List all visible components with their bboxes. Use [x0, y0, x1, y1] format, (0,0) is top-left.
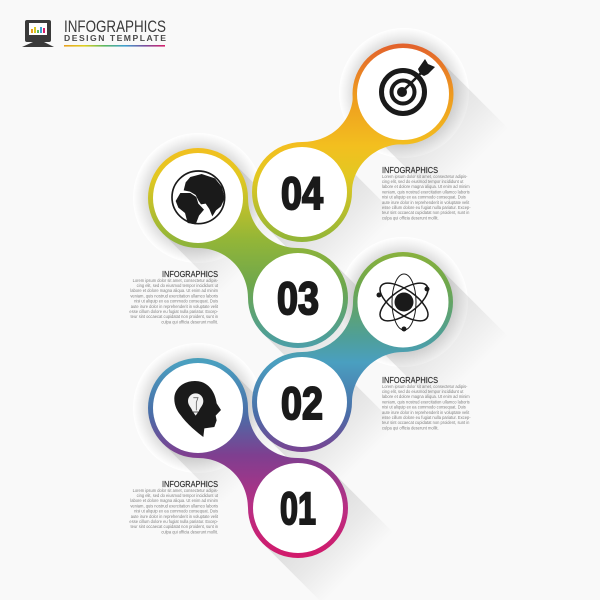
ring: globe: [148, 148, 248, 248]
text block: top right: cing elit, sed do eiusmod tempor incididunt ut: [382, 179, 464, 184]
icon: head with light bulb: [174, 381, 221, 437]
icon: computer monitor: [22, 20, 54, 47]
text block: middle left: teur sint occaecat cupidatat non proident, sunt in: [131, 314, 218, 319]
number 01: 01: [280, 483, 316, 534]
text block: top right: [382, 165, 471, 220]
text block: top right: Lorem ipsum dolor sit amet, consectetur adipis-: [382, 173, 468, 179]
connector: globe to 03: [198, 198, 298, 298]
text block: middle left: nisi ut aliquip ex ea commodo consequat. Duis: [134, 298, 219, 304]
text block: middle left: INFOGRAPHICS: [162, 269, 218, 279]
text block: top right: aute irure dolor in reprehenderit in voluptate velit: [382, 199, 470, 205]
text block: bottom left: nisi ut aliquip ex ea commodo consequat. Duis: [134, 508, 219, 514]
text block: lower right: teur sint occaecat cupidatat non proident, sunt in: [382, 420, 470, 425]
text block: middle left: labore et dolore magna aliqua. Ut enim ad minim: [130, 288, 218, 293]
text block: lower right: Lorem ipsum dolor sit amet, consectetur adipis-: [382, 383, 468, 389]
logo: [22, 17, 166, 47]
text block: top right: esse cillum dolore eu fugiat nulla pariatur. Excep-: [382, 205, 471, 210]
ring: 04: [252, 142, 352, 242]
text block: top right: culpa qui officia deserunt mollit.: [382, 215, 439, 220]
text block: lower right: veniam, quis nostrud exercitation ullamco laboris: [382, 399, 470, 404]
ring: head: [148, 358, 248, 458]
text block: lower right: nisi ut aliquip ex ea commodo consequat. Duis: [382, 404, 466, 410]
text block: middle left: aute irure dolor in reprehenderit in voluptate velit: [131, 303, 219, 309]
text block: bottom left: Lorem ipsum dolor sit amet, consectetur adipis-: [133, 487, 218, 493]
connector: head to 01: [198, 408, 298, 508]
text block: middle left: esse cillum dolore eu fugiat nulla pariatur. Excep-: [129, 309, 218, 314]
number 04: 04: [281, 168, 323, 219]
icon: target: [382, 59, 435, 114]
text block: lower right: [382, 375, 471, 430]
icon: atom: [374, 274, 434, 332]
text block: top right: labore et dolore magna aliqua. Ut enim ad minim: [382, 184, 470, 189]
text block: bottom left: esse cillum dolore eu fugiat nulla pariatur. Excep-: [129, 519, 218, 524]
number 02: 02: [281, 378, 323, 429]
text block: bottom left: cing elit, sed do eiusmod tempor incididunt ut: [137, 493, 219, 498]
ring: 01: [248, 458, 348, 558]
ring: 03: [248, 248, 348, 348]
icon: globe: [172, 171, 225, 224]
text block: lower right: aute irure dolor in reprehenderit in voluptate velit: [382, 409, 470, 415]
ring: 02: [252, 352, 352, 452]
text block: middle left: Lorem ipsum dolor sit amet, consectetur adipis-: [133, 277, 218, 283]
number 03: 03: [277, 273, 319, 324]
text block: lower right: culpa qui officia deserunt mollit.: [382, 425, 439, 430]
text block: lower right: INFOGRAPHICS: [382, 375, 438, 385]
ring: atom: [353, 252, 453, 352]
rainbow line: [64, 45, 165, 47]
text block: bottom left: aute irure dolor in reprehenderit in voluptate velit: [131, 513, 219, 519]
text block: top right: INFOGRAPHICS: [382, 165, 438, 175]
text block: top right: nisi ut aliquip ex ea commodo consequat. Duis: [382, 194, 466, 200]
text block: bottom left: culpa qui officia deserunt mollit.: [161, 529, 218, 534]
text block: bottom left: [129, 479, 219, 534]
text block: bottom left: labore et dolore magna aliqua. Ut enim ad minim: [130, 498, 218, 503]
text block: top right: veniam, quis nostrud exercitation ullamco laboris: [382, 189, 470, 194]
text block: bottom left: INFOGRAPHICS: [162, 479, 218, 489]
backing discs: [133, 28, 469, 473]
colored ribbon: [148, 44, 454, 558]
text block: bottom left: teur sint occaecat cupidatat non proident, sunt in: [131, 524, 218, 529]
text block: lower right: cing elit, sed do eiusmod tempor incididunt ut: [382, 389, 464, 394]
text block: middle left: veniam, quis nostrud exercitation ullamco laboris: [130, 293, 219, 298]
connector: target to 04: [302, 94, 404, 192]
connector: atom to 02: [302, 302, 403, 402]
logo subtitle: DESIGN TEMPLATE: [64, 33, 166, 43]
long shadows: [198, 94, 473, 568]
text block: middle left: cing elit, sed do eiusmod tempor incididunt ut: [137, 283, 219, 288]
white faces: [153, 48, 449, 553]
ring: target: [352, 44, 454, 144]
text block: middle left: [129, 269, 219, 324]
text block: middle left: culpa qui officia deserunt mollit.: [161, 319, 218, 324]
text block: top right: teur sint occaecat cupidatat non proident, sunt in: [382, 210, 470, 215]
logo title: INFOGRAPHICS: [64, 17, 166, 36]
text block: lower right: esse cillum dolore eu fugiat nulla pariatur. Excep-: [382, 415, 471, 420]
text block: bottom left: veniam, quis nostrud exercitation ullamco laboris: [130, 503, 219, 508]
text block: lower right: labore et dolore magna aliqua. Ut enim ad minim: [382, 394, 470, 399]
